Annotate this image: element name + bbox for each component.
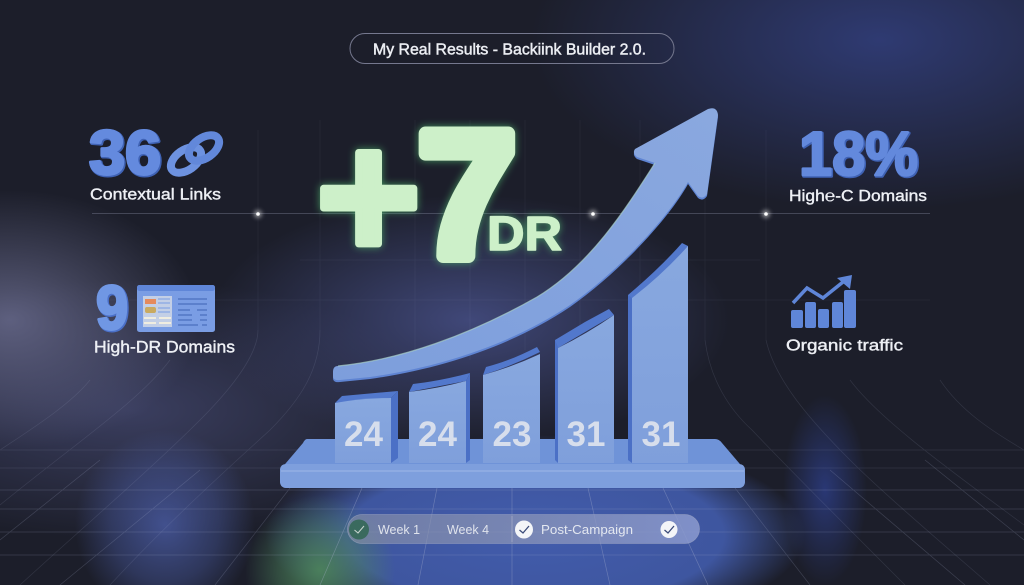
stat: 18 percent high-C domains: 18% (800, 121, 919, 190)
step: post-campaign: Post-Campaign (541, 523, 633, 537)
bar: 31 (555, 309, 614, 463)
centre divider line (92, 212, 930, 214)
step: week 1 (349, 520, 420, 540)
stat: 9 high-DR domains: High-DR Domains (94, 338, 235, 356)
stat: organic traffic (786, 275, 903, 354)
headline: plus seven DR: + (316, 96, 421, 297)
bar: 23: 23 (493, 415, 531, 454)
stat: 9 high-DR domains (94, 274, 235, 356)
step: post-campaign (515, 520, 633, 538)
headline: plus seven DR (316, 95, 562, 297)
step: week 1: Week 1 (378, 523, 420, 537)
stat: organic traffic: Organic traffic (786, 338, 903, 354)
bar: 31 (628, 243, 688, 463)
timeline pill (348, 514, 700, 544)
stat: 18 percent high-C domains: 18% (799, 120, 918, 189)
icon: chain link (166, 130, 224, 178)
growth arrow (333, 108, 718, 382)
icon: traffic chart (791, 275, 856, 328)
bar chart (335, 243, 688, 463)
bar: 24: 24 (344, 415, 383, 454)
bar: 31: 31 (642, 415, 680, 454)
headline: plus seven DR: DR (487, 208, 562, 261)
glow dots (254, 210, 770, 218)
bar: 24 (409, 373, 470, 463)
headline: plus seven DR: 7 (418, 95, 516, 294)
stat: 36 contextual links: 36 (90, 120, 162, 189)
background grid (0, 120, 1024, 585)
bar: 24: 24 (418, 415, 457, 454)
stat: 9 high-DR domains: 9 (97, 275, 129, 344)
stat: 18 percent high-C domains: High℮-C Domains (789, 188, 927, 205)
icon: browser window (137, 285, 215, 332)
bar: 31: 31 (567, 415, 605, 454)
step: week 4: Week 4 (447, 523, 489, 537)
title pill (350, 34, 674, 64)
stat: 36 contextual links: 36 (89, 119, 161, 188)
bar chart platform (280, 439, 745, 488)
bar: 23 (483, 347, 540, 463)
stat: 36 contextual links: Contextual Links (90, 186, 221, 204)
icon: final check (660, 521, 678, 538)
stat: 9 high-DR domains: 9 (96, 274, 128, 343)
bar: 24 (335, 391, 398, 463)
stat: 36 contextual links (89, 119, 224, 204)
title pill: My Real Results - Backiink Builder 2.0. (373, 42, 646, 58)
